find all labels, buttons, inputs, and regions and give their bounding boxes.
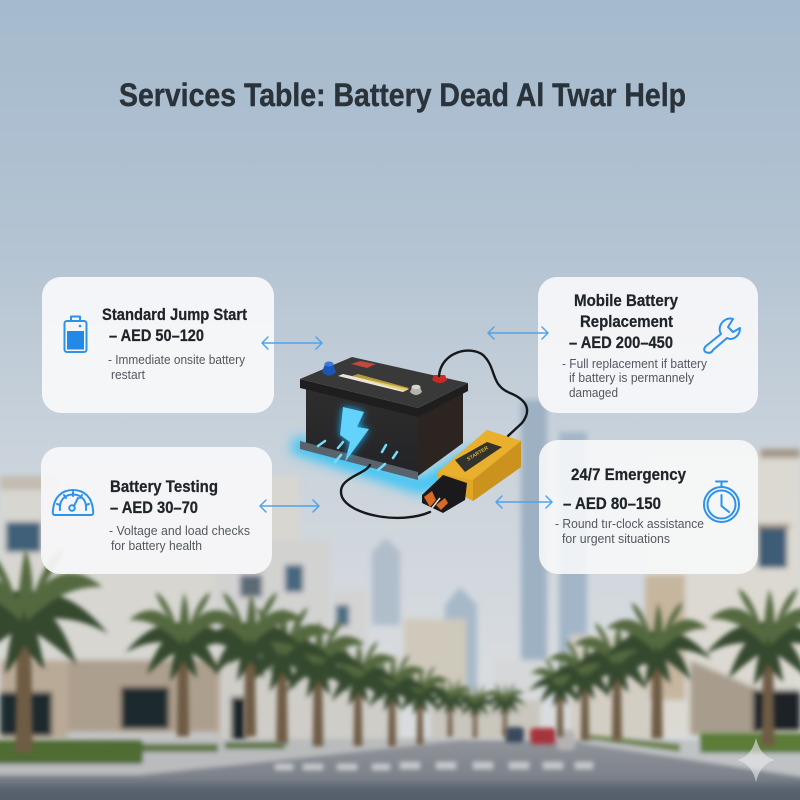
panel: 24/7 emergency	[539, 440, 758, 574]
road and sidewalks	[0, 727, 800, 800]
icon: sparkle watermark	[737, 738, 775, 782]
heading: Mobile Battery	[574, 292, 679, 310]
heading: Replacement	[580, 313, 673, 331]
arrow: replacement to battery	[488, 327, 548, 339]
heading: Standard Jump Start	[102, 306, 247, 324]
price: – AED 80–150	[563, 495, 661, 513]
icon: wrench	[704, 318, 740, 353]
central illustration: battery and jump starter	[290, 351, 527, 518]
price: – AED 200–450	[569, 334, 673, 352]
panel: battery testing	[41, 447, 272, 574]
description: - Round tır-clock assistance	[555, 517, 704, 531]
blue glow under battery	[290, 436, 485, 494]
description: if battery is permannely	[569, 371, 695, 385]
description: for urgent situations	[562, 532, 670, 546]
description: restart	[111, 368, 145, 382]
price: – AED 50–120	[109, 327, 204, 345]
description: - Voltage and load checks	[109, 524, 250, 538]
description: damaged	[569, 386, 618, 400]
jump starter	[422, 430, 521, 513]
lightning bolt	[318, 407, 397, 470]
arrow: testing to battery	[260, 500, 319, 512]
heading	[574, 292, 679, 331]
description	[555, 517, 704, 546]
icon: stopwatch	[704, 482, 739, 522]
palm trees	[0, 548, 800, 752]
arrow: jump start to battery	[262, 337, 322, 349]
heading: 24/7 Emergency	[571, 466, 687, 484]
title: Services Table: Battery Dead Al Twar Help	[119, 77, 686, 113]
price: – AED 30–70	[110, 499, 198, 517]
label on jump starter: STARTER	[466, 445, 490, 463]
description: - Immediate onsite battery	[108, 353, 246, 367]
icon: battery	[64, 316, 86, 352]
icon: gauge	[53, 490, 93, 515]
heading: Battery Testing	[110, 478, 218, 496]
description	[108, 353, 246, 382]
cables	[341, 351, 527, 518]
battery terminals	[322, 362, 447, 395]
panel: standard jump start	[42, 277, 274, 413]
description	[109, 524, 250, 553]
panel: mobile battery replacement	[538, 277, 758, 413]
description	[562, 357, 708, 400]
description: - Full replacement if battery	[562, 357, 708, 371]
arrow: emergency to jump starter	[496, 496, 552, 508]
description: for battery health	[111, 539, 202, 553]
clamp	[422, 475, 467, 513]
battery	[300, 357, 468, 480]
